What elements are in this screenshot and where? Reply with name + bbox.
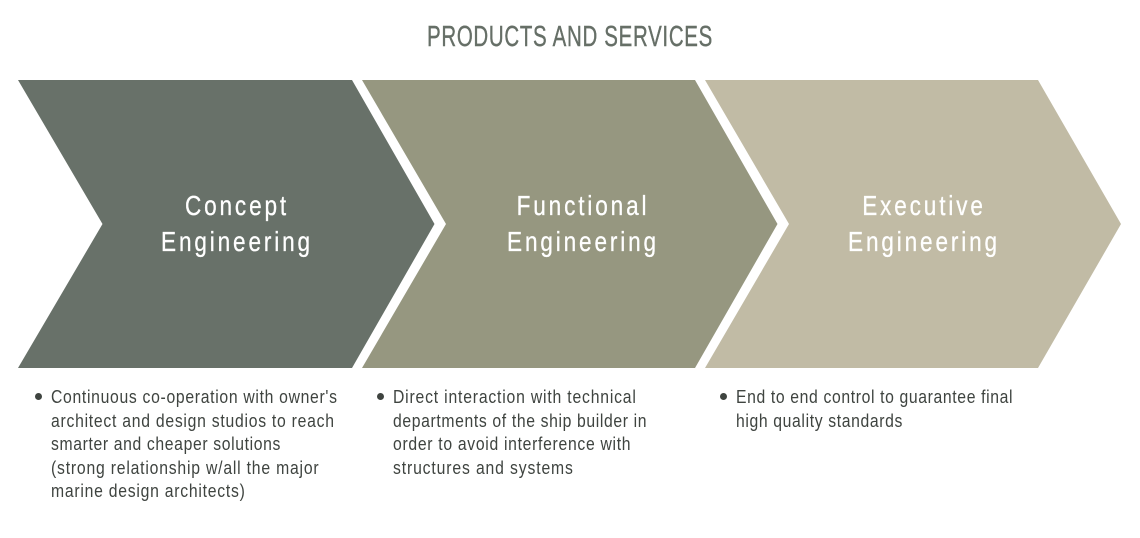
title: PRODUCTS AND SERVICES [427,21,713,53]
text: concept: marine design architects) [51,480,246,501]
heading: concept engineering: Concept [185,190,289,221]
text: functional [393,386,647,478]
text: concept: architect and design studios to reach [51,410,335,430]
bullet: functional [377,393,384,400]
text: concept: Continuous co-operation with owner's [51,386,338,407]
text: executive: high quality standards [736,410,903,430]
text: concept: (strong relationship w/all the major [51,456,319,478]
text: concept [51,386,338,501]
heading: concept engineering: Engineering [161,226,313,257]
heading: functional engineering: Engineering [507,226,659,257]
text: functional: structures and systems [393,456,574,478]
text: executive [736,386,1013,431]
heading: executive engineering: Executive [862,190,986,221]
heading: functional engineering: Functional [517,190,649,221]
heading: executive engineering: Engineering [848,226,1000,257]
heading: executive engineering [848,190,1000,258]
chevron: executive engineering [705,80,1121,368]
text: concept: smarter and cheaper solutions [51,433,281,454]
text: functional: departments of the ship builder in [393,410,647,430]
heading: concept engineering [161,190,313,258]
chevron: concept engineering [18,80,434,368]
chevron: functional engineering [362,80,778,368]
text: executive: End to end control to guarantee final [736,386,1013,407]
bullet: executive [720,393,727,400]
text: functional: order to avoid interference with [393,433,631,454]
bullet: concept [35,393,42,400]
text: functional: Direct interaction with technical [393,386,637,407]
heading: functional engineering [507,190,659,258]
